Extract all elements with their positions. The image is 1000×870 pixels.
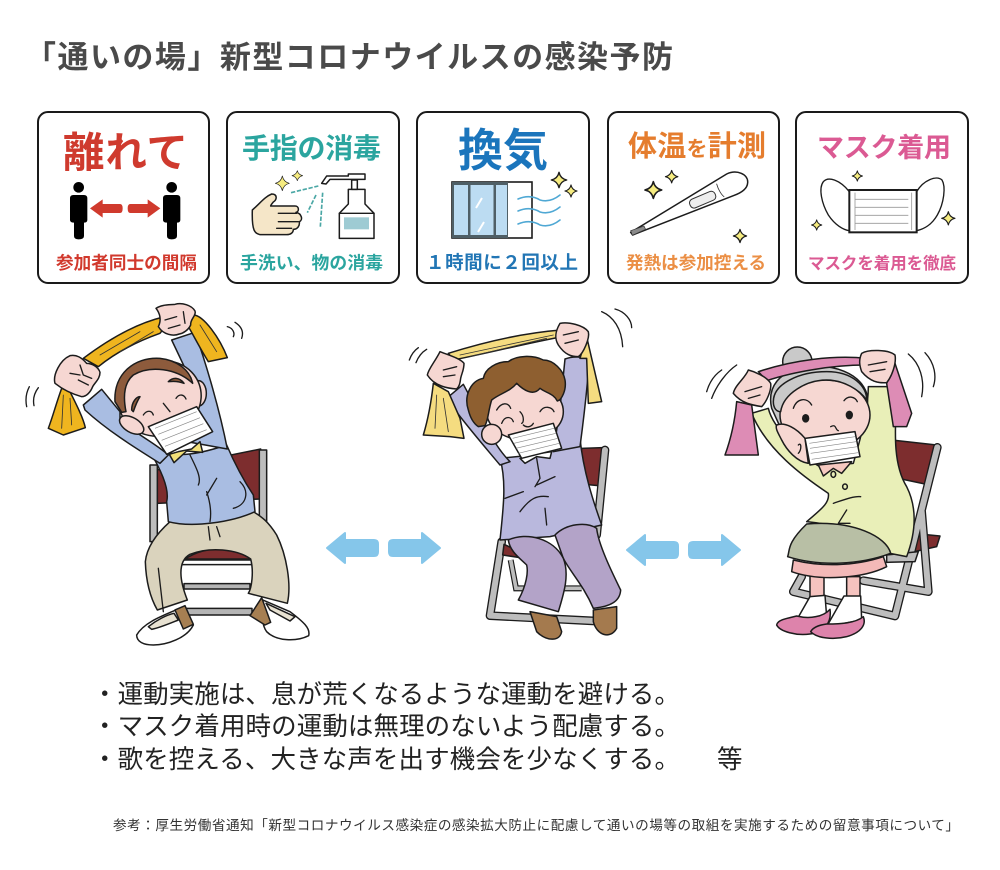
legs xyxy=(810,575,860,600)
head and hair xyxy=(108,349,212,448)
socks and shoes xyxy=(777,595,864,638)
underskirt xyxy=(792,557,887,578)
text block: exercise guidelines: ・歌を控える、大きな声を出す機会を少なくする。 xyxy=(92,746,680,774)
heading: ventilation: 換気 xyxy=(458,125,548,176)
head and hair xyxy=(467,356,565,444)
chair xyxy=(490,448,605,621)
sweater and arms xyxy=(752,387,914,557)
collar and buttons xyxy=(818,462,852,489)
panel: hand disinfection xyxy=(227,112,399,283)
trousers xyxy=(145,512,289,610)
chair xyxy=(150,449,267,615)
heading: distance: 離れて xyxy=(63,129,188,176)
text block: exercise guidelines: ・マスク着用時の運動は無理のないよう配慮する。 xyxy=(92,713,680,741)
towel xyxy=(725,363,912,455)
heading: hand disinfection: 手指の消毒 xyxy=(242,133,381,164)
illustration: man exercising with towel xyxy=(26,304,309,645)
text: temperature note: 発熱は参加控える xyxy=(626,253,766,273)
title: 「通いの場」新型コロナウイルスの感染予防 xyxy=(25,40,673,75)
icon: two people with arrows xyxy=(70,182,180,239)
panel: temperature xyxy=(608,112,779,283)
shoes xyxy=(137,598,309,645)
icon: hand and sanitizer bottle xyxy=(252,171,374,238)
head and hair xyxy=(771,347,870,463)
panel: distance xyxy=(38,112,209,283)
icon: thermometer xyxy=(631,170,748,243)
motion lines xyxy=(707,353,935,398)
arrow: spacing between man and woman xyxy=(327,533,440,563)
icon: mask xyxy=(812,171,955,232)
heading: temperature: 体温を計測 xyxy=(628,130,766,163)
motion lines xyxy=(409,309,632,363)
text block: exercise guidelines: ・運動実施は、息が荒くなるような運動を避ける。 xyxy=(92,681,680,709)
towel xyxy=(48,315,227,435)
motion lines xyxy=(26,322,243,407)
heading: mask: マスク着用 xyxy=(817,133,951,163)
text: ventilation note: １時間に２回以上 xyxy=(426,252,578,273)
shoes xyxy=(530,607,617,639)
face mask xyxy=(805,432,860,465)
face mask xyxy=(148,407,213,454)
panel: mask xyxy=(796,112,968,283)
hands xyxy=(427,323,589,389)
towel band over head xyxy=(758,357,867,381)
sweater and arms xyxy=(83,332,255,524)
arrow: spacing between women xyxy=(627,535,740,565)
collar xyxy=(169,442,203,463)
text block: exercise guidelines xyxy=(92,681,743,774)
text block: exercise guidelines: 等 xyxy=(717,746,743,774)
collar xyxy=(520,452,552,463)
hands xyxy=(733,351,895,407)
sweater and arms xyxy=(447,357,602,540)
text: distance note: 参加者同士の間隔 xyxy=(56,253,197,273)
illustration: middle woman exercising with towel xyxy=(409,309,632,639)
skirt xyxy=(788,523,891,563)
illustration: elderly woman exercising with towel xyxy=(707,347,940,638)
text: reference note: 参考：厚生労働省通知「新型コロナウイルス感染症の感染拡大防止に配慮して通いの場等の取組を実施するための留意事項について」 xyxy=(113,817,959,833)
icon: open window and air flow xyxy=(452,172,577,238)
chair xyxy=(793,440,940,616)
face mask xyxy=(508,423,562,458)
text: mask note: マスクを着用を徹底 xyxy=(808,253,956,273)
hands xyxy=(55,304,195,397)
text: disinfection note: 手洗い、物の消毒 xyxy=(240,253,383,273)
trousers xyxy=(508,524,621,612)
towel xyxy=(423,330,602,438)
panel: ventilation xyxy=(417,112,589,283)
